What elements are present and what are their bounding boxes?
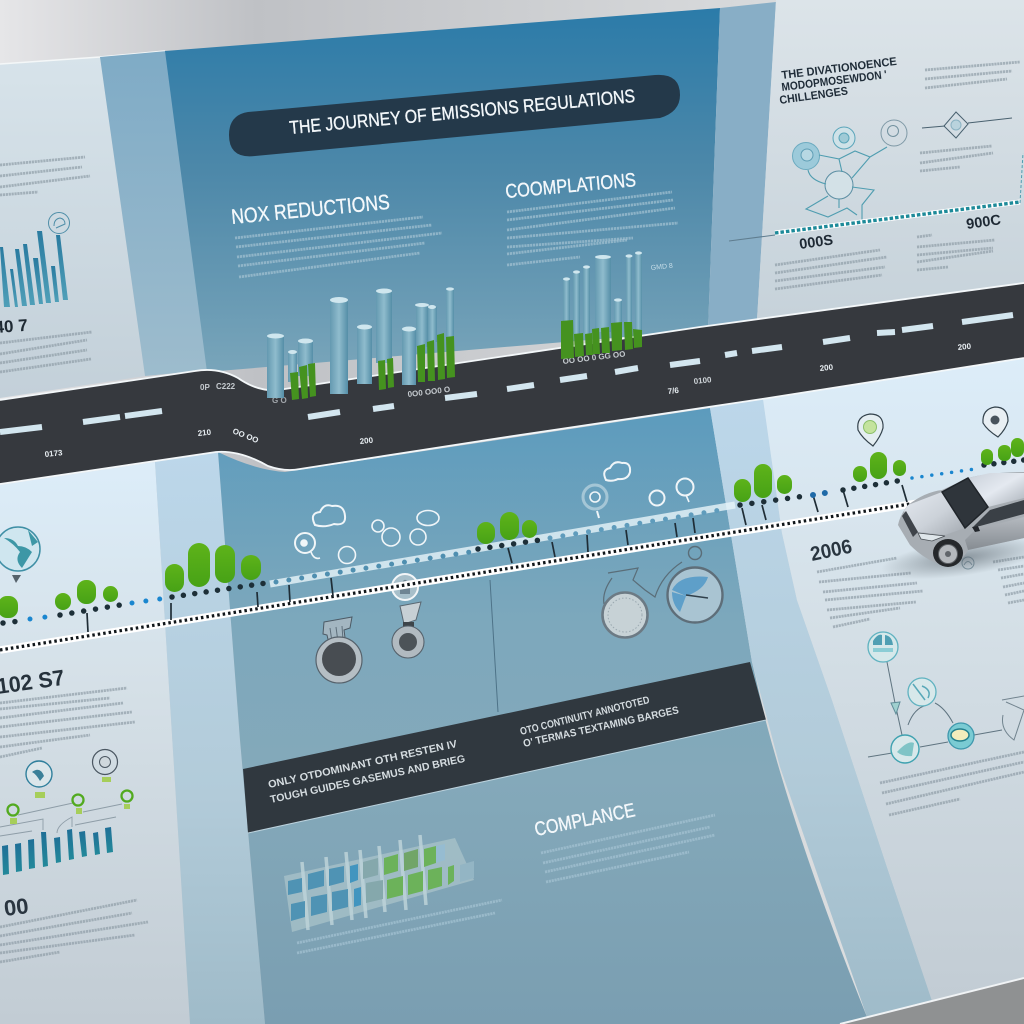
text block: lower right network [880,752,1024,815]
dot track [3,460,1024,623]
text block: 9000 [917,235,995,270]
banner text: left: ONLY OTDOMINANT OTH RESTEN IV [267,738,458,791]
panel: lower main blue [218,408,867,1024]
icon: small badge under car [962,557,974,569]
road lane markings [0,315,1013,432]
icon: right node [922,112,1012,138]
text block: 2006 [817,558,923,627]
timeline [0,407,1024,650]
icon: gauge pair [602,546,722,638]
text block: 00 [0,900,148,962]
text block: compliance [541,815,715,882]
title banner: THE JOURNEY OF EMISSIONS REGULATIONS [288,85,636,138]
text block: compliance grid caption [297,900,502,953]
green milestone bars [0,438,1024,618]
chart label: compilations: GMD 8 [650,263,673,272]
year label: 9000: 900C [965,212,1002,233]
banner: dark band [243,662,766,833]
text block: upper left intro [0,157,90,195]
diagram: challenge network [792,120,907,220]
icon: wheel left [316,617,362,683]
tick marks [87,485,907,632]
weather icons: left group [295,505,439,564]
glowing mid-section of the dot track [270,505,735,584]
road year labels: 200 [359,436,374,446]
band: lower left strip [155,452,265,1024]
car [878,472,1024,587]
car roof [968,473,1024,507]
text block: upper right top [925,62,1020,88]
car front wheel [933,539,963,567]
car mirror [972,526,980,532]
road year labels: C222 [216,382,236,391]
band: upper left strip [100,51,207,376]
chart: compliance grid [284,835,474,932]
road year labels [44,342,972,459]
text block: right node [920,146,993,171]
road year labels: 0100 [693,375,712,386]
car silhouette [898,472,1024,565]
band: lower right strip [710,398,932,1017]
year axis: lower white dotted line [0,486,1024,650]
panel: upper left [0,51,165,398]
road year labels: 0173 [44,448,63,459]
text block: compilations [507,192,678,265]
banner text: left: TOUGH GUIDES GASEMUS AND BRIEG [269,753,466,806]
car hood [904,492,965,535]
panel: lower right [763,358,1024,1024]
icon: wheel right [392,602,424,658]
road year labels: 200 [819,363,834,373]
road year labels: 210 [197,428,212,438]
icon: pin with green leaf [858,414,883,446]
icon: teal badge [26,761,52,787]
heading: upper right: THE DIVATIONOENCE [781,56,898,82]
banner text: right: OTO CONTINUITY ANNOTOTED [519,694,651,738]
car grille [902,511,918,537]
panel: upper main blue [165,8,720,372]
road year labels: OO OO 0 GG OO [562,349,626,366]
bar chart: lower left [0,777,132,875]
text block: upper left year [0,332,92,372]
panel: upper right [729,0,1024,320]
diagram: lower right network [868,632,1024,763]
banner text: right: O' TERMAS TEXTAMING BARGES [522,704,680,750]
weather icons: right group [583,462,694,518]
timeline: upper right [729,153,1023,241]
bar chart: upper left [0,231,68,307]
year label: 000S: 000S [798,232,834,253]
heading: compliance: COMPLANCE [533,799,637,841]
text block: beside car [993,557,1024,603]
bar chart: compilations [561,251,642,359]
heading: compilations: COOMPLATIONS [504,169,637,203]
road year labels: 0O0 OO0 O [407,385,451,399]
icon: gray badge [92,750,118,774]
heading: upper right: MODOPMOSEWDON ' [781,69,888,94]
road [0,283,1024,484]
icon: globe [0,527,40,583]
road year labels: OO OO [231,427,260,445]
text block: NOx reductions [235,217,442,277]
title banner [229,75,680,156]
road year labels: 0P [200,383,210,392]
car door panel [965,517,1024,550]
heading: upper right: CHILLENGES [779,85,849,107]
year label: 00: 00 [3,893,30,921]
text block: 000S [775,250,887,289]
band: upper right strip [708,2,776,330]
car windshield [942,478,988,528]
icon: upper left chart marker [48,212,70,234]
text block: 102 S7 [0,688,135,757]
bar chart: NOx reductions [267,287,455,400]
icon: lock marker [392,574,418,600]
heading: upper right [779,56,898,107]
panel: lower left [0,462,190,1024]
road year labels: 7/6 [667,386,680,396]
road year labels: G O [272,396,287,405]
divider line [490,580,498,712]
icon: pin with dark glyph [983,407,1008,437]
heading: NOx reductions: NOX REDUCTIONS [230,191,391,229]
year label: 2006: 2006 [808,536,854,566]
road year labels: 200 [957,342,972,352]
car side window [973,500,1024,527]
car headlight [918,533,945,541]
